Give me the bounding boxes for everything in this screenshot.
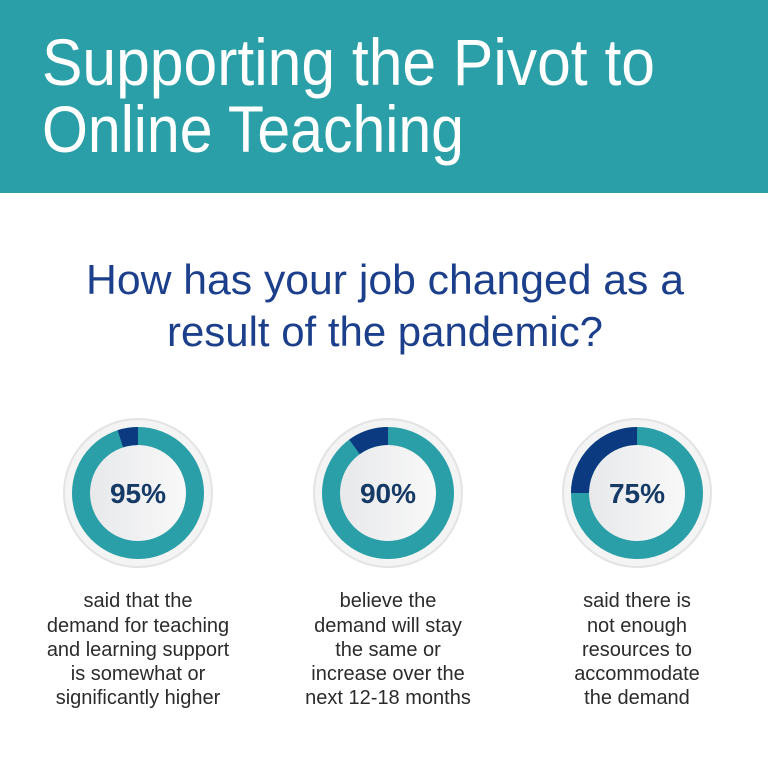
caption 2: believe the bbox=[340, 590, 436, 612]
question heading bbox=[86, 256, 685, 355]
caption 3: resources to bbox=[582, 639, 692, 661]
donut 95% bbox=[64, 419, 212, 567]
donut 90%: 90% bbox=[360, 478, 416, 509]
title: Supporting the Pivot to bbox=[42, 25, 655, 99]
header band bbox=[0, 0, 768, 193]
caption 1: is somewhat or bbox=[71, 663, 206, 685]
donut 75%: 75% bbox=[609, 478, 665, 509]
question heading: How has your job changed as a bbox=[86, 256, 685, 303]
donut 95%: 95% bbox=[110, 478, 166, 509]
caption 2: demand will stay bbox=[314, 615, 462, 637]
title: Online Teaching bbox=[42, 92, 464, 166]
caption 1: significantly higher bbox=[56, 687, 221, 709]
caption 3: said there is bbox=[583, 590, 691, 612]
caption 1: and learning support bbox=[47, 639, 230, 661]
donut 75% bbox=[563, 419, 711, 567]
caption 3: not enough bbox=[587, 615, 687, 637]
caption 3 bbox=[574, 590, 700, 709]
caption 3: the demand bbox=[584, 687, 690, 709]
caption 1 bbox=[47, 590, 230, 709]
caption 1: said that the bbox=[84, 590, 192, 612]
question heading: result of the pandemic? bbox=[167, 308, 603, 355]
donut 90% bbox=[308, 413, 468, 573]
caption 2 bbox=[305, 590, 471, 709]
caption 1: demand for teaching bbox=[47, 615, 229, 637]
caption 2: increase over the bbox=[311, 663, 465, 685]
caption 3: accommodate bbox=[574, 663, 700, 685]
caption 2: next 12-18 months bbox=[305, 687, 471, 709]
caption 2: the same or bbox=[335, 639, 441, 661]
title bbox=[42, 25, 655, 166]
